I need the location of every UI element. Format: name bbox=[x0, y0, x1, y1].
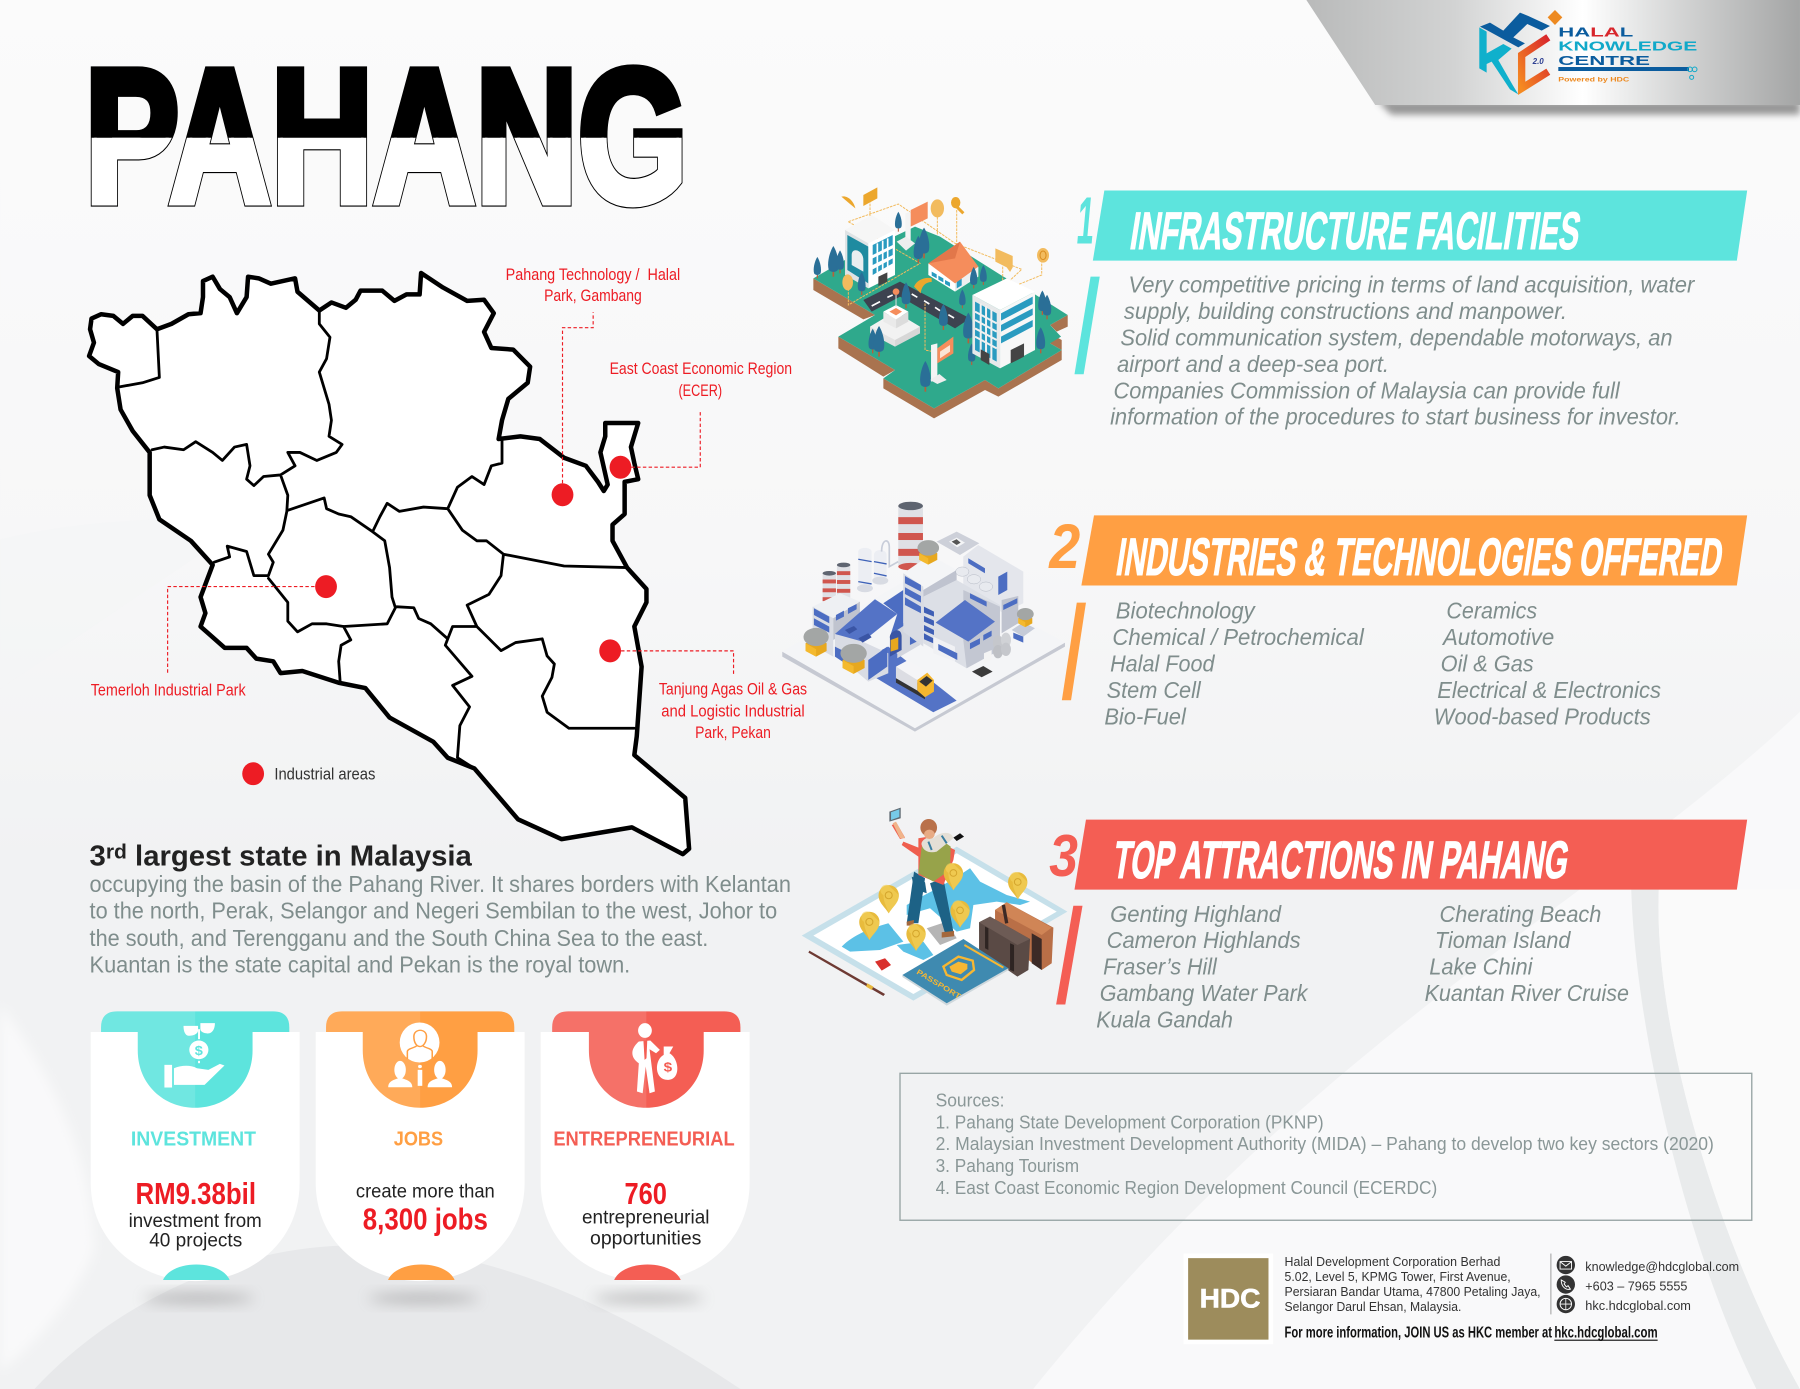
industries list, column 2: Electrical & Electronics bbox=[1437, 677, 1661, 703]
accent bar bbox=[1074, 277, 1100, 374]
attractions list, column 2: Lake Chini bbox=[1429, 954, 1533, 980]
address: 5.02, Level 5, KPMG Tower, First Avenue, bbox=[1285, 1269, 1511, 1284]
address bbox=[1285, 1254, 1541, 1314]
banner bbox=[1081, 515, 1747, 585]
industries list, column 1: Chemical / Petrochemical bbox=[1112, 624, 1365, 650]
map labels: and Logistic Industrial bbox=[661, 701, 805, 720]
description: the south, and Terengganu and the South China Sea to the east. bbox=[90, 925, 708, 951]
attractions list, column 1 bbox=[1096, 901, 1309, 1032]
label: JOBS bbox=[394, 1128, 443, 1151]
attractions list, column 1: Cameron Highlands bbox=[1107, 927, 1301, 953]
contact details: +603 – 7965 5555 bbox=[1585, 1278, 1687, 1293]
logo: Halal Knowledge Centre bbox=[1479, 10, 1697, 94]
icon: businessman with money bag: $ bbox=[664, 1060, 672, 1075]
map labels: Tanjung Agas Oil & Gas bbox=[659, 679, 807, 699]
map labels bbox=[91, 265, 807, 742]
accent bar bbox=[1062, 603, 1086, 700]
map labels: Temerloh Industrial Park bbox=[91, 681, 246, 700]
industries list, column 1 bbox=[1104, 598, 1365, 729]
map labels: (ECER) bbox=[678, 381, 722, 400]
illustration: smart city infrastructure bbox=[813, 187, 1068, 418]
logo: Halal Knowledge Centre: HA LA L bbox=[1558, 26, 1634, 40]
illustration: traveller on map bbox=[802, 808, 1067, 1006]
figure: RM9.38bil bbox=[135, 1176, 256, 1211]
card: entrepreneurial bbox=[541, 1011, 750, 1281]
title: PAHANG: PAHANG bbox=[85, 31, 688, 243]
sources box: 3. Pahang Tourism bbox=[936, 1155, 1079, 1176]
industries list, column 2: Oil & Gas bbox=[1441, 651, 1534, 677]
call to action: hkc.hdcglobal.com bbox=[1554, 1323, 1658, 1341]
subheading: rd bbox=[106, 841, 127, 864]
description: to the north, Perak, Selangor and Negeri Sembilan to the west, Johor to bbox=[90, 897, 777, 923]
industries list, column 1: Halal Food bbox=[1110, 651, 1216, 677]
figure: 760 bbox=[624, 1176, 667, 1211]
attractions list, column 2: Kuantan River Cruise bbox=[1425, 980, 1629, 1006]
label: INVESTMENT bbox=[131, 1128, 256, 1151]
sources box: 2. Malaysian Investment Development Authority (MIDA) – Pahang to develop two key sectors (2020) bbox=[936, 1133, 1714, 1154]
map labels: Pahang Technology / Halal bbox=[506, 265, 680, 284]
legend bbox=[242, 762, 375, 785]
attractions list, column 1: Genting Highland bbox=[1110, 901, 1282, 927]
banner bbox=[1074, 820, 1747, 890]
map of Pahang bbox=[89, 265, 807, 854]
sources box: 1. Pahang State Development Corporation (PKNP) bbox=[936, 1111, 1324, 1132]
caption: investment from bbox=[129, 1210, 262, 1232]
caption: entrepreneurial bbox=[582, 1207, 709, 1229]
icon: hand with coin and sprout bbox=[164, 1023, 224, 1088]
illustration: traveller on map: PASSPORT bbox=[915, 967, 963, 1001]
illustration: isometric factory bbox=[782, 502, 1065, 732]
accent bar bbox=[1056, 906, 1083, 1004]
description: occupying the basin of the Pahang River. It shares borders with Kelantan bbox=[90, 871, 791, 897]
legend: Industrial areas bbox=[274, 764, 375, 783]
number: 2 bbox=[1048, 512, 1080, 582]
attractions list, column 2 bbox=[1425, 901, 1629, 1006]
section 1: infrastructure facilities: 1 bbox=[1077, 184, 1094, 258]
description: supply, building constructions and manpower. bbox=[1124, 298, 1567, 324]
card: jobs bbox=[316, 1011, 525, 1281]
contact details bbox=[1585, 1259, 1739, 1313]
address: Persiaran Bandar Utama, 47800 Petaling Jaya, bbox=[1285, 1284, 1541, 1299]
label: ENTREPRENEURIAL bbox=[553, 1128, 735, 1151]
attractions list, column 1: Gambang Water Park bbox=[1100, 980, 1309, 1006]
sources box bbox=[900, 1073, 1752, 1220]
icon: businessman with money bag bbox=[632, 1023, 677, 1093]
industries list, column 2: Wood-based Products bbox=[1434, 703, 1651, 729]
leader lines bbox=[168, 312, 734, 674]
description bbox=[90, 871, 791, 977]
card: entrepreneurial: opportunities bbox=[590, 1227, 702, 1249]
map labels: Park, Pekan bbox=[695, 723, 771, 742]
footer bbox=[1184, 1254, 1739, 1344]
logo: Halal Knowledge Centre: Powered by HDC bbox=[1558, 77, 1630, 84]
industries list, column 1: Bio-Fuel bbox=[1104, 703, 1187, 729]
logo: Halal Knowledge Centre: CENTRE bbox=[1558, 54, 1650, 68]
icon: hand with coin and sprout: $ bbox=[195, 1044, 203, 1058]
contact details: hkc.hdcglobal.com bbox=[1585, 1298, 1691, 1313]
industries list, column 2 bbox=[1434, 598, 1661, 729]
logo: Halal Knowledge Centre: 2.0 bbox=[1532, 57, 1544, 66]
map labels: East Coast Economic Region bbox=[610, 359, 792, 378]
section 2: industries and technologies bbox=[1048, 512, 1747, 729]
address: Selangor Darul Ehsan, Malaysia. bbox=[1285, 1299, 1461, 1314]
HDC logo bbox=[1184, 1254, 1273, 1344]
icon: people bbox=[388, 1023, 452, 1087]
description: Kuantan is the state capital and Pekan is the royal town. bbox=[90, 951, 630, 977]
call to action: For more information, JOIN US as HKC member at bbox=[1285, 1323, 1552, 1341]
attractions list, column 1: Fraser’s Hill bbox=[1103, 954, 1218, 980]
attractions list, column 2: Tioman Island bbox=[1435, 927, 1572, 953]
number: 3 bbox=[1049, 822, 1078, 889]
address: Halal Development Corporation Berhad bbox=[1285, 1254, 1500, 1269]
description: Very competitive pricing in terms of land acquisition, water bbox=[1128, 272, 1696, 298]
description bbox=[1110, 272, 1696, 430]
intro text block bbox=[90, 841, 791, 977]
industries list, column 2: Automotive bbox=[1441, 624, 1554, 650]
sources box: 4. East Coast Economic Region Development Council (ECERDC) bbox=[936, 1177, 1437, 1198]
state outline and district borders bbox=[89, 273, 689, 854]
caption: create more than bbox=[356, 1180, 495, 1202]
title: PAHANG bbox=[90, 64, 682, 208]
card: investment bbox=[91, 1011, 300, 1281]
logo: Halal Knowledge Centre: KNOWLEDGE bbox=[1558, 39, 1697, 54]
industries list, column 1: Stem Cell bbox=[1107, 677, 1202, 703]
contact details: knowledge@hdcglobal.com bbox=[1585, 1259, 1739, 1274]
card: investment: 40 projects bbox=[149, 1230, 242, 1252]
header chrome banner with logo bbox=[1306, 0, 1800, 115]
card shadows bbox=[144, 1294, 704, 1303]
subheading: largest state in Malaysia bbox=[127, 841, 473, 873]
HDC logo: HDC bbox=[1200, 1283, 1260, 1313]
section 3: top attractions bbox=[1049, 820, 1747, 1032]
title: PAHANG: PAHANG bbox=[85, 31, 688, 243]
attractions list, column 2: Cherating Beach bbox=[1440, 901, 1601, 927]
description: Solid communication system, dependable motorways, an bbox=[1120, 325, 1673, 351]
industrial area markers bbox=[315, 456, 631, 662]
description: Companies Commission of Malaysia can provide full bbox=[1114, 377, 1621, 403]
subheading: 3 bbox=[90, 841, 106, 873]
attractions list, column 1: Kuala Gandah bbox=[1096, 1006, 1233, 1032]
map labels: Park, Gambang bbox=[544, 286, 642, 305]
section 1: infrastructure facilities bbox=[1074, 184, 1747, 430]
contact icons bbox=[1557, 1256, 1575, 1313]
sources box: Sources: bbox=[936, 1090, 1004, 1111]
description: information of the procedures to start business for investor. bbox=[1110, 404, 1681, 430]
industries list, column 1: Biotechnology bbox=[1116, 598, 1256, 624]
industries list, column 2: Ceramics bbox=[1446, 598, 1537, 624]
description: airport and a deep-sea port. bbox=[1117, 351, 1389, 377]
banner bbox=[1093, 191, 1747, 261]
figure: 8,300 jobs bbox=[363, 1201, 488, 1236]
